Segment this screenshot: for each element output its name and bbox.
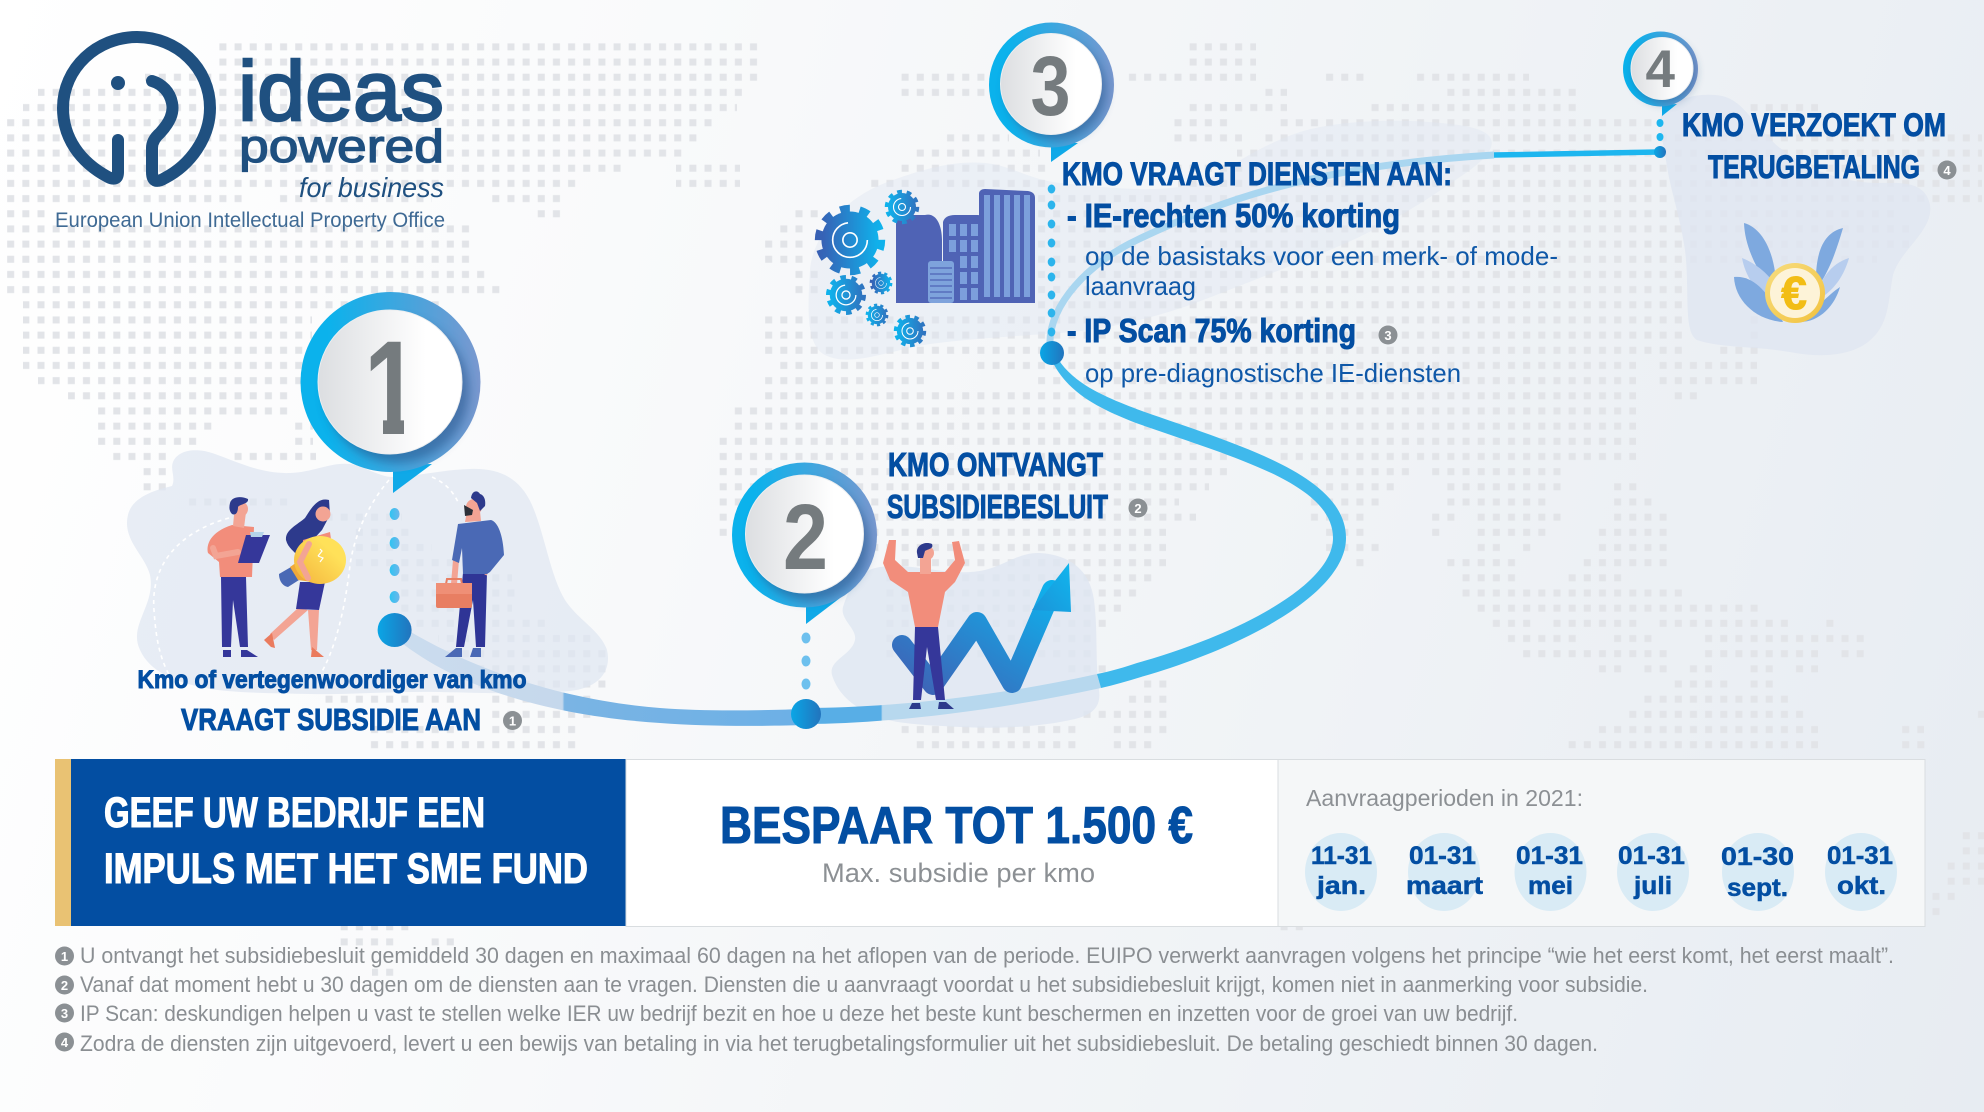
blob: step 3 backdrop: [809, 121, 1492, 360]
note marker 3: 3: [1384, 328, 1392, 343]
step 1: label: [138, 666, 526, 737]
period: october: [1825, 833, 1897, 911]
banner: [55, 759, 1925, 926]
note marker 4: [1938, 160, 1956, 180]
step 4: label: TERUGBETALING: [1708, 149, 1920, 185]
step 2: connector dots: [791, 632, 821, 729]
step 3: label and details: laanvraag: [1085, 271, 1196, 301]
period: march: maart: [1406, 872, 1484, 900]
step 2: label: SUBSIDIEBESLUIT: [887, 488, 1108, 525]
banner: headline panel: [71, 759, 626, 926]
period: january: jan.: [1316, 872, 1366, 900]
period: january: 11-31: [1311, 842, 1372, 870]
gears: [819, 192, 924, 345]
logo wordmark: ideas: [238, 44, 444, 138]
step 3: label and details: op pre-diagnostische IE-diensten: [1085, 358, 1461, 388]
leaves: [1734, 223, 1849, 322]
footnote 1: U ontvangt het subsidiebesluit gemiddeld 30 dagen en maximaal 60 dagen na het aflopen van de periode. EUIPO verwerkt aanvragen volgens het principe “wie het eerst komt, het eerst maalt”.: [80, 943, 1894, 968]
step 1: number badge: 1: [364, 314, 419, 463]
step 4: number badge: [1623, 32, 1698, 116]
step 3: connector dots: [1040, 184, 1064, 365]
note marker 2: [1128, 498, 1148, 518]
logo mark: [63, 37, 210, 181]
period: march: [1406, 833, 1484, 911]
blob: step 2 backdrop: [832, 553, 1099, 728]
banner: gold accent: [55, 759, 71, 926]
footnote 2: 2: [61, 978, 68, 993]
rising arrow: [902, 563, 1071, 685]
footnote 1: 1: [61, 949, 68, 964]
footnote 3: 3: [61, 1006, 68, 1021]
logo wordmark: powered: [239, 120, 444, 172]
step 4: connector dots: [1654, 119, 1666, 158]
banner: application periods panel: Aanvraagperioden in 2021:: [1306, 785, 1583, 811]
step 3: number badge: 3: [1030, 39, 1070, 133]
banner: savings panel: [626, 760, 1278, 926]
period: march: 01-31: [1409, 842, 1476, 870]
step 2: man with rising arrow: [883, 540, 1071, 709]
route path: step 3 to step 4 bright: [1494, 152, 1660, 155]
logo wordmark: [238, 44, 444, 203]
logo organisation name: European Union Intellectual Property Office: [55, 209, 445, 232]
period: september: [1721, 833, 1794, 911]
dashed orbits: [154, 477, 458, 680]
step 3: label and details: [1062, 156, 1558, 388]
period: october: 01-31: [1827, 842, 1893, 870]
step 3: label and details: - IE-rechten 50% korting: [1067, 197, 1400, 234]
note marker 3: [1378, 326, 1398, 344]
logo wordmark: for business: [299, 172, 444, 203]
note marker 4: 4: [1943, 163, 1951, 178]
footnotes: [55, 943, 1894, 1056]
banner: application periods panel: [1278, 760, 1925, 926]
period: october: okt.: [1837, 872, 1886, 900]
banner: savings panel: BESPAAR TOT 1.500 €: [720, 797, 1193, 855]
banner: headline panel: GEEF UW BEDRIJF EEN: [104, 789, 485, 837]
step 4: euro coin with leaves: €: [1781, 267, 1807, 319]
step 3: label and details: - IP Scan 75% korting: [1067, 312, 1356, 349]
man with clipboard: [208, 497, 270, 657]
coin: [1765, 263, 1825, 323]
step 1: label: Kmo of vertegenwoordiger van kmo: [138, 666, 526, 694]
period: may: 01-31: [1516, 842, 1583, 870]
step 3: label and details: KMO VRAAGT DIENSTEN AAN:: [1062, 156, 1452, 192]
step 3: label and details: op de basistaks voor een merk- of mode-: [1085, 241, 1558, 271]
route path: step 2 to step 3: [1049, 350, 1346, 688]
man with briefcase: [436, 491, 504, 657]
banner: headline panel: IMPULS MET HET SME FUND: [104, 845, 588, 893]
route path: step 1 to step 2: [398, 628, 806, 726]
period: may: [1514, 833, 1586, 911]
step 3: buildings and gears: [819, 189, 1035, 345]
step 4: euro coin with leaves: [1734, 223, 1849, 323]
blob: step 1 backdrop: [127, 450, 608, 694]
step 1: connector dots: [378, 508, 412, 647]
period: january: [1305, 833, 1377, 911]
note marker 1: [503, 711, 522, 730]
period: july: juli: [1633, 872, 1672, 900]
footnote 3: IP Scan: deskundigen helpen u vast te stellen welke IER uw bedrijf bezit en hoe u deze het beste kunt beschermen en inzetten voor de groei van uw bedrijf.: [80, 1001, 1518, 1026]
buildings: [896, 189, 1035, 303]
route path: step 2 lower segment: [806, 674, 1101, 724]
step 3: number badge: [989, 22, 1114, 162]
step 4: label: [1682, 107, 1956, 185]
woman with light bulb: [264, 499, 346, 657]
period: september: sept.: [1727, 874, 1788, 902]
period: september: 01-30: [1721, 843, 1794, 871]
step 1: people illustration: [154, 477, 504, 680]
footnote 4: 4: [61, 1035, 69, 1050]
step 2: label: KMO ONTVANGT: [888, 446, 1103, 483]
footnote 2: Vanaf dat moment hebt u 30 dagen om de diensten aan te vragen. Diensten die u aanvraagt voordat u het subsidiebesluit krijgt, komen niet in aanmerking voor subsidie.: [80, 972, 1648, 997]
step 4: number badge: 4: [1646, 40, 1676, 99]
route path: step 3 to step 4 light: [1050, 155, 1494, 345]
note marker 1: 1: [509, 714, 516, 728]
period: may: mei: [1528, 872, 1573, 900]
step 1: label: VRAAGT SUBSIDIE AAN: [181, 702, 481, 737]
step 2: number badge: 2: [783, 485, 828, 589]
banner: savings panel: Max. subsidie per kmo: [822, 858, 1095, 888]
cheering man: [883, 540, 965, 709]
step 1: number badge: [300, 292, 480, 493]
step 2: label: [887, 446, 1148, 525]
footnote 4: Zodra de diensten zijn uitgevoerd, levert u een bewijs van betaling in via het terugbetalingsformulier uit het subsidiebesluit. De betaling geschiedt binnen 30 dagen.: [80, 1031, 1598, 1056]
period: july: [1617, 833, 1689, 911]
step 2: number badge: [732, 462, 877, 624]
note marker 2: 2: [1134, 501, 1142, 516]
period: july: 01-31: [1618, 842, 1685, 870]
logo: ideas powered for business: [55, 37, 445, 232]
blob: step 4 backdrop: [1660, 95, 1930, 355]
